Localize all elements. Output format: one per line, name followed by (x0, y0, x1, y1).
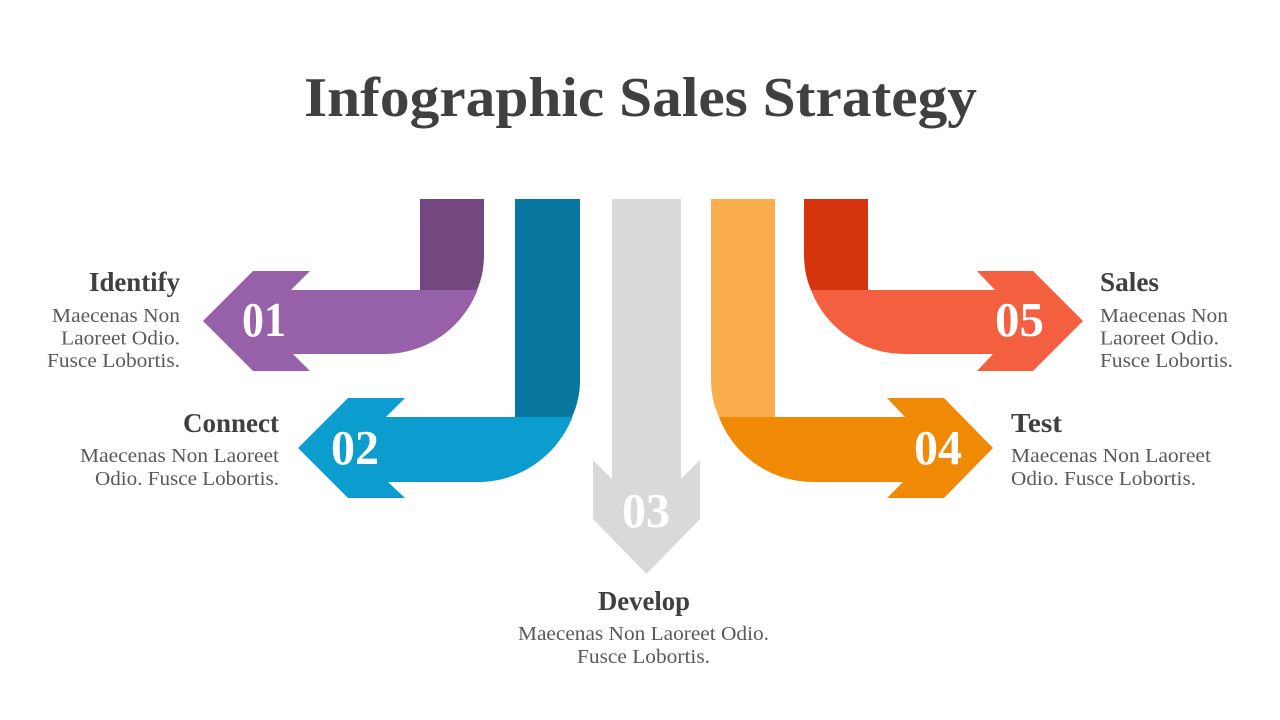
text: Develop: Develop (598, 586, 690, 616)
text: Sales: Sales (1100, 267, 1159, 297)
title: Infographic Sales Strategy (304, 67, 977, 129)
arrow 03: Develop (593, 199, 700, 574)
arrow 02 dark stem (515, 199, 580, 417)
text: Identify: Identify (89, 267, 180, 297)
text: Connect (80, 408, 279, 490)
text: Test: Odio. Fusce Lobortis. (1011, 468, 1196, 490)
arrow 04: Test (711, 199, 993, 498)
text: Identify: Laoreet Odio. (61, 328, 180, 350)
arrow 01: Identify (203, 199, 484, 371)
arrow 01 dark stem (420, 199, 484, 290)
text: Test (1011, 408, 1211, 490)
text: Develop: Fusce Lobortis. (577, 646, 710, 668)
number 03: 03 (622, 483, 670, 538)
number 05: 05 (995, 292, 1044, 347)
text: Connect: Odio. Fusce Lobortis. (95, 468, 279, 490)
text: Connect: Maecenas Non Laoreet (80, 445, 279, 467)
arrow 05 head and bend (811, 271, 1083, 371)
text: Identify: Fusce Lobortis. (47, 350, 180, 372)
text: Sales: Fusce Lobortis. (1100, 350, 1233, 372)
text: Develop (518, 586, 769, 668)
text: Develop: Maecenas Non Laoreet Odio. (518, 623, 769, 645)
number 01: 01 (242, 292, 286, 347)
text: Sales: Maecenas Non (1100, 305, 1228, 327)
text: Test: Test (1011, 408, 1062, 438)
arrow 04 head and bend (719, 398, 993, 498)
number 04: 04 (914, 420, 962, 475)
arrow 05: Sales (804, 199, 1083, 371)
arrow 04 light stem (711, 199, 775, 417)
text: Sales (1100, 267, 1233, 372)
arrow 01 head and bend (203, 271, 478, 371)
arrow 02 head and bend (298, 398, 572, 498)
text: Connect: Connect (183, 408, 279, 438)
text: Identify: Maecenas Non (52, 305, 180, 327)
arrow 02: Connect (298, 199, 580, 498)
text: Test: Maecenas Non Laoreet (1011, 445, 1211, 467)
text: Identify (47, 267, 180, 372)
arrow 03 shape (593, 199, 700, 574)
arrow 05 dark stem (804, 199, 868, 290)
number 02: 02 (331, 420, 379, 475)
text: Sales: Laoreet Odio. (1100, 328, 1219, 350)
